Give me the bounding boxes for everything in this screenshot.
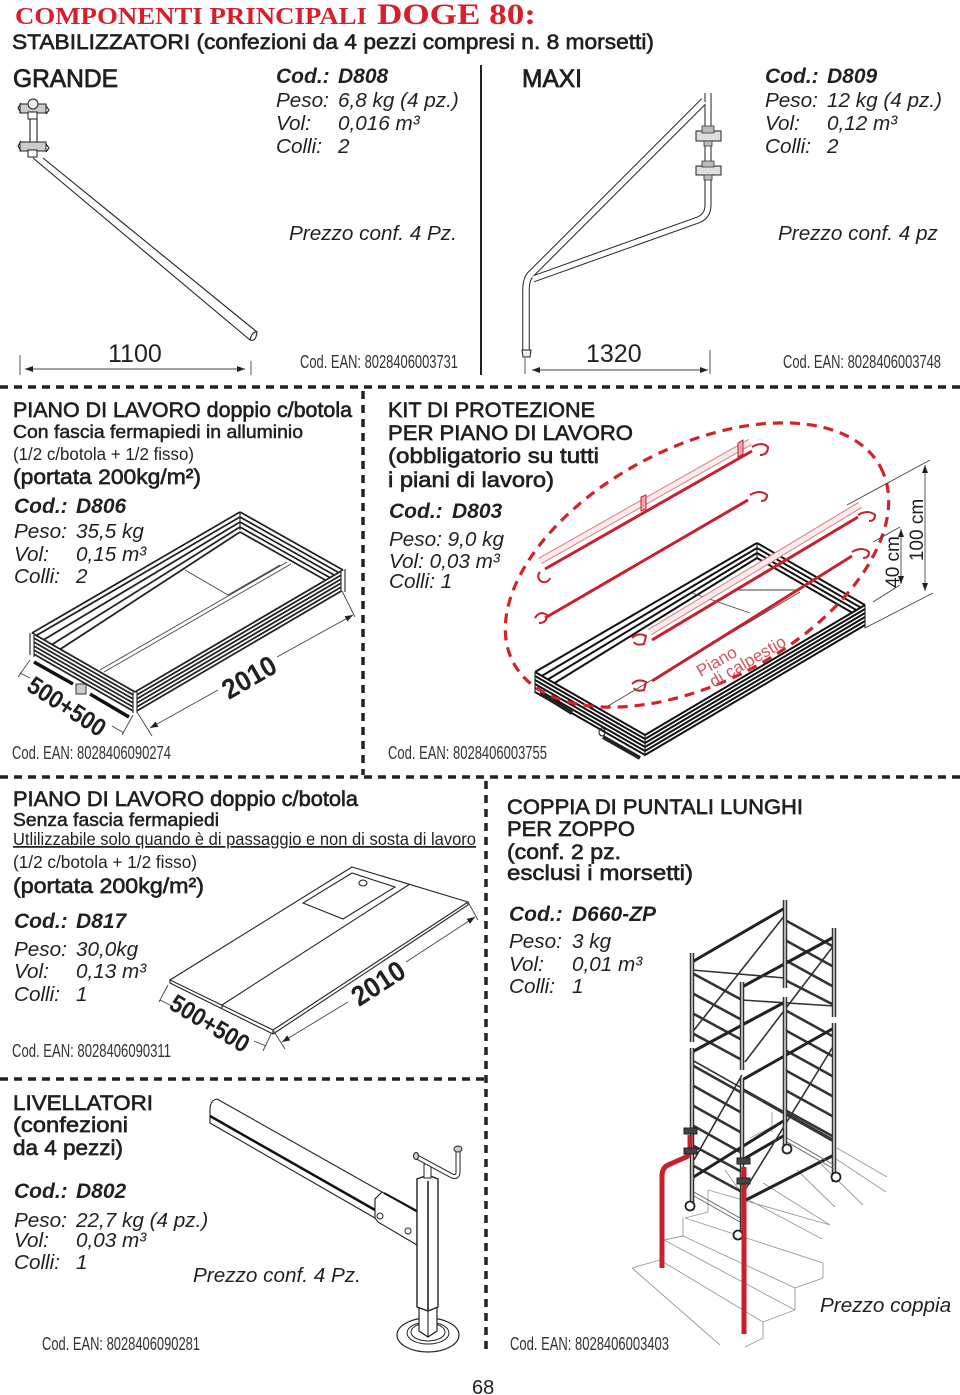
specs: 22,7 kg (4 pz.)	[75, 1209, 208, 1232]
panel: coppia di puntali	[507, 795, 951, 1354]
dimension 1320: 1320	[586, 340, 642, 368]
specs: Vol:	[509, 953, 544, 976]
heading: PER PIANO DI LAVORO	[388, 421, 633, 445]
specs: Vol:	[765, 112, 800, 135]
specs: 0,15 m³	[76, 543, 147, 566]
drawing: framed platform	[30, 512, 345, 717]
heading: (obbligatorio su tutti	[388, 444, 599, 468]
title	[15, 0, 536, 31]
specs: D803	[452, 500, 503, 523]
ean code: Cod. EAN: 8028406003403	[510, 1334, 669, 1354]
price: Prezzo conf. 4 pz	[778, 222, 938, 245]
heading: GRANDE	[13, 65, 118, 93]
heading: KIT DI PROTEZIONE	[388, 398, 595, 422]
note: (1/2 c/botola + 1/2 fisso)	[13, 444, 194, 464]
subheading: Senza fascia fermapiedi	[13, 810, 219, 830]
specs: Colli: 1	[389, 570, 452, 593]
specs: 1	[76, 983, 88, 1006]
specs: Cod.:	[509, 903, 563, 926]
specs: Colli:	[276, 135, 322, 158]
ean code: Cod. EAN: 8028406090281	[42, 1334, 200, 1354]
ean code: Cod. EAN: 8028406090274	[12, 743, 171, 763]
heading: (conf. 2 pz.	[507, 840, 621, 864]
specs: 0,03 m³	[76, 1229, 147, 1252]
specs: 0,016 m³	[338, 112, 421, 135]
dimension 2010: 2010	[346, 955, 411, 1012]
specs: 2	[337, 135, 350, 158]
price: Prezzo conf. 4 Pz.	[193, 1264, 361, 1287]
specs: Vol:	[14, 1229, 49, 1252]
specs: Colli:	[14, 983, 60, 1006]
heading: MAXI	[522, 65, 582, 93]
specs: Vol:	[14, 960, 49, 983]
heading: COPPIA DI PUNTALI LUNGHI	[507, 795, 803, 819]
drawing: stabilizer maxi	[522, 93, 721, 357]
dimensions height	[847, 460, 933, 628]
specs: Colli:	[14, 565, 60, 588]
dashed ellipse	[458, 364, 936, 766]
heading: esclusi i morsetti)	[507, 861, 693, 885]
heading: PER ZOPPO	[507, 817, 635, 841]
heading: LIVELLATORI	[13, 1091, 153, 1115]
dimensions height: 100 cm	[907, 499, 928, 561]
specs	[276, 65, 459, 158]
specs	[509, 903, 657, 998]
red rails	[535, 440, 875, 691]
heading	[388, 398, 633, 492]
dimension 2010	[137, 591, 355, 736]
panel: piano di lavoro senza fascia	[12, 787, 478, 1061]
dimension 500+500: 500+500	[165, 989, 254, 1059]
specs: Vol:	[276, 112, 311, 135]
specs: Peso:	[14, 520, 67, 543]
panel: stabilizzatore maxi	[522, 65, 942, 374]
specs: 0,13 m³	[76, 960, 147, 983]
dimension 1320	[525, 340, 710, 374]
panel: stabilizzatore grande	[13, 65, 459, 375]
specs: Cod.:	[14, 1180, 68, 1203]
specs: Peso: 9,0 kg	[389, 528, 504, 551]
title: COMPONENTI PRINCIPALI	[15, 4, 367, 30]
specs: 35,5 kg	[76, 520, 144, 543]
specs: Vol:	[14, 543, 49, 566]
ean code: Cod. EAN: 8028406003731	[300, 352, 458, 372]
specs: Vol: 0,03 m³	[389, 550, 501, 573]
specs: Peso:	[509, 930, 562, 953]
dimension 2010: 2010	[216, 650, 282, 705]
label: piano di calpestio: Piano	[693, 642, 740, 681]
specs: 12 kg (4 pz.)	[827, 89, 942, 112]
specs: 30,0kg	[76, 938, 139, 961]
specs: 0,01 m³	[572, 953, 643, 976]
load: (portata 200kg/m²)	[13, 465, 201, 489]
specs: Cod.:	[14, 910, 68, 933]
dimensions height: 40 cm	[883, 536, 904, 588]
usage note: Utlilizzabile solo quando è di passaggio e non di sosta di lavoro	[13, 829, 476, 849]
subheading: Con fascia fermapiedi in alluminio	[13, 422, 303, 442]
specs	[14, 495, 147, 588]
specs	[14, 910, 147, 1006]
ean code: Cod. EAN: 8028406003755	[388, 743, 547, 763]
specs: D808	[338, 65, 389, 88]
price: Prezzo coppia	[820, 1294, 951, 1317]
specs: 6,8 kg (4 pz.)	[338, 89, 459, 112]
price: Prezzo conf. 4 Pz.	[289, 222, 457, 245]
specs: Colli:	[765, 135, 811, 158]
drawing: flat platform	[170, 867, 468, 1034]
specs: Cod.:	[389, 500, 443, 523]
drawing: platform with rails	[535, 543, 865, 758]
stairs	[632, 1112, 887, 1347]
red extension legs	[662, 1128, 750, 1334]
panel: kit di protezione	[388, 364, 936, 766]
load: (portata 200kg/m²)	[13, 874, 204, 898]
heading: PIANO DI LAVORO doppio c/botola	[13, 398, 352, 422]
heading	[507, 795, 803, 885]
drawing: jack	[210, 1099, 462, 1352]
specs: D802	[76, 1180, 127, 1203]
specs: Peso:	[276, 89, 329, 112]
specs: D809	[827, 65, 878, 88]
specs: 1	[76, 1251, 88, 1274]
specs	[765, 65, 942, 158]
specs: D817	[76, 910, 128, 933]
note: (1/2 c/botola + 1/2 fisso)	[13, 852, 197, 872]
specs: Peso:	[14, 1209, 67, 1232]
specs: Cod.:	[765, 65, 819, 88]
subtitle: STABILIZZATORI (confezioni da 4 pezzi compresi n. 8 morsetti)	[12, 30, 654, 54]
specs: Cod.:	[276, 65, 330, 88]
dimension 500+500	[18, 660, 133, 743]
specs: D806	[76, 495, 127, 518]
specs: Colli:	[509, 975, 555, 998]
heading: da 4 pezzi)	[13, 1136, 123, 1160]
specs: 2	[75, 565, 88, 588]
heading: (confezioni	[13, 1113, 128, 1137]
specs: D660-ZP	[572, 903, 657, 926]
dimension 1100	[20, 340, 251, 375]
specs: Cod.:	[14, 495, 68, 518]
drawing: stabilizer grande	[18, 99, 257, 340]
specs: Colli:	[14, 1251, 60, 1274]
specs: 1	[572, 975, 584, 998]
specs	[14, 1180, 208, 1274]
drawing: scaffold tower	[686, 900, 840, 1240]
label: piano di calpestio: di calpestio	[706, 632, 789, 691]
panel: livellatori	[13, 1091, 462, 1354]
heading	[13, 1091, 153, 1160]
dimension 500+500: 500+500	[22, 671, 111, 743]
specs: 3 kg	[572, 930, 612, 953]
specs	[389, 500, 504, 593]
heading: PIANO DI LAVORO doppio c/botola	[13, 787, 358, 811]
divider	[480, 65, 482, 375]
dimension 2010	[273, 902, 478, 1049]
dimension 1100: 1100	[108, 340, 162, 368]
specs: Peso:	[765, 89, 818, 112]
specs: 0,12 m³	[827, 112, 898, 135]
heading: i piani di lavoro)	[388, 468, 554, 492]
panel: piano di lavoro con fascia	[12, 398, 355, 763]
ean code: Cod. EAN: 8028406090311	[12, 1041, 171, 1061]
specs: Peso:	[14, 938, 67, 961]
specs: 2	[826, 135, 839, 158]
